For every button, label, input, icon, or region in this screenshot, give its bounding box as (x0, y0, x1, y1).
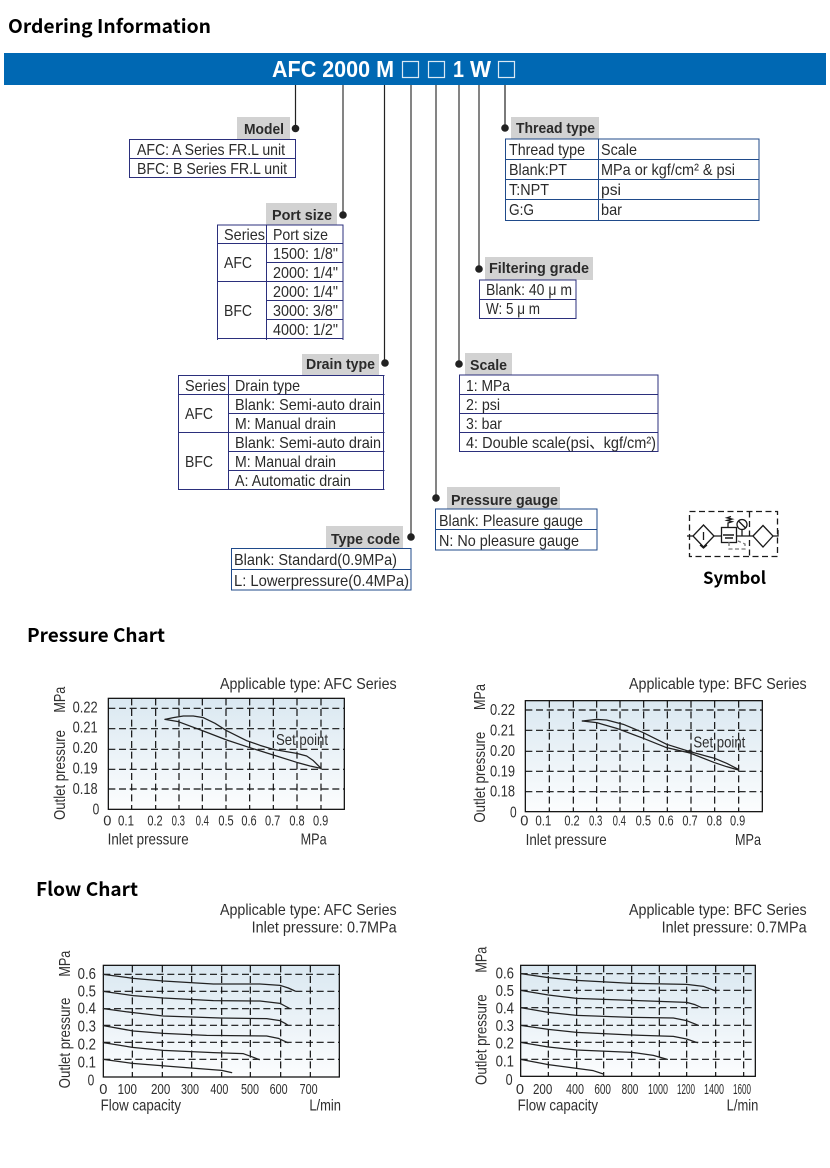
chart: flow AFC: Outlet pressure (57, 997, 74, 1088)
chart: pressure AFC: 0.2 (147, 813, 163, 829)
panel: thread type: T:NPT (509, 182, 549, 199)
chart: flow AFC: Flow capacity (101, 1098, 181, 1115)
panel: port size: 4000: 1/2" (273, 322, 338, 339)
chart: flow AFC: 0.1 (78, 1054, 96, 1071)
panel: drain type: Blank: Semi-auto drain (235, 397, 381, 414)
chart: pressure BFC: 0.4 (613, 813, 626, 829)
chart: flow AFC: Inlet pressure: 0.7MPa (252, 920, 397, 937)
chart: pressure BFC: Set point (693, 734, 746, 751)
panel: model (130, 117, 296, 178)
chart: flow BFC: MPa (474, 946, 491, 973)
chart: pressure AFC: 0.1 (118, 813, 134, 829)
chart: flow AFC: 600 (270, 1082, 288, 1098)
chart: pressure AFC: 0.3 (172, 813, 185, 829)
chart: flow AFC: 200 (151, 1082, 170, 1098)
chart: pressure BFC: 0.7 (682, 813, 698, 829)
chart: pressure AFC: Outlet pressure (52, 730, 69, 820)
chart: flow BFC: 200 (533, 1082, 552, 1098)
chart: flow BFC: 0.4 (496, 1000, 514, 1017)
chart: flow AFC: 0.6 (78, 966, 96, 983)
chart: pressure AFC: 0 (103, 813, 111, 829)
chart: flow AFC: 300 (181, 1082, 199, 1098)
chart: pressure BFC: 0.22 (490, 702, 515, 719)
chart: pressure AFC: 0.7 (265, 813, 280, 829)
panel: drain type: Drain type (235, 378, 300, 395)
chart: flow AFC: 0 (88, 1072, 95, 1089)
chart: pressure AFC: 0 (93, 801, 100, 818)
chart: pressure AFC: 0.8 (289, 813, 305, 829)
panel: thread type: Blank:PT (509, 162, 567, 179)
chart: pressure BFC: 0 (510, 804, 517, 821)
chart: pressure AFC: 0.21 (73, 719, 98, 736)
chart: pressure AFC: 0.6 (241, 813, 257, 829)
chart: flow BFC: 600 (594, 1082, 611, 1098)
chart: pressure BFC: 0.19 (490, 764, 515, 781)
panel: thread type: G:G (509, 202, 534, 219)
chart: flow AFC: 0.5 (78, 983, 96, 1000)
panel: drain type: M: Manual drain (235, 416, 336, 433)
icon: pneumatic symbol (687, 512, 778, 557)
chart: flow AFC: L/min (309, 1098, 341, 1115)
chart: flow BFC: L/min (727, 1098, 758, 1115)
panel: port size: BFC (224, 303, 252, 320)
chart: flow BFC: 0.2 (496, 1035, 514, 1052)
panel: pressure gauge: Pressure gauge (451, 492, 558, 509)
panel: filtering grade: Filtering grade (489, 260, 589, 277)
chart: flow BFC (474, 902, 807, 1115)
chart: pressure AFC: 0.22 (73, 700, 98, 717)
panel: filtering grade: Blank: 40 μ m (486, 282, 572, 299)
chart: pressure BFC: 0.3 (589, 813, 602, 829)
banner: model code: AFC 2000 M (272, 56, 394, 82)
chart: flow BFC: 0.6 (496, 965, 514, 982)
chart: pressure BFC: 0.18 (490, 784, 515, 801)
chart: flow BFC: 0 (506, 1072, 513, 1089)
chart: pressure BFC (472, 676, 807, 849)
chart: pressure AFC: 0.5 (218, 813, 234, 829)
panel: filtering grade: W: 5 μ m (486, 301, 540, 318)
chart: flow AFC: 0.2 (78, 1037, 96, 1054)
chart: flow AFC: 100 (118, 1082, 137, 1098)
panel: port size (217, 203, 344, 340)
panel: port size: Port size (272, 207, 332, 224)
panel: drain type (178, 354, 384, 490)
chart: pressure BFC: 0.21 (490, 722, 515, 739)
chart: pressure AFC: 0.4 (196, 813, 209, 829)
chart: flow AFC: Applicable type: AFC Series (220, 902, 397, 919)
panel: scale: 3: bar (466, 416, 503, 433)
panel: drain type: A: Automatic drain (235, 473, 351, 490)
banner: model code: W (470, 56, 491, 82)
panel: scale (460, 353, 658, 452)
chart: pressure BFC: 0.9 (730, 813, 745, 829)
chart: pressure BFC: Inlet pressure (526, 832, 607, 849)
chart: flow AFC: 700 (300, 1082, 318, 1098)
panel: pressure gauge: Blank: Pleasure gauge (439, 513, 583, 530)
chart: pressure AFC: 0.9 (313, 813, 328, 829)
chart: pressure BFC: 0.20 (490, 743, 515, 760)
chart: flow AFC: 0.3 (78, 1019, 96, 1036)
chart: flow BFC: Outlet pressure (474, 994, 491, 1085)
panel: thread type: bar (601, 202, 623, 219)
chart: flow BFC: Flow capacity (518, 1098, 598, 1115)
panel: filtering grade (480, 257, 593, 318)
panel: port size: 2000: 1/4" (273, 265, 338, 282)
panel: port size: Port size (273, 227, 328, 244)
chart: pressure AFC: Inlet pressure (108, 831, 189, 848)
panel: model: Model (244, 121, 284, 138)
chart: pressure BFC: 0.6 (658, 813, 674, 829)
panel: scale: Scale (470, 357, 507, 374)
panel: port size: 1500: 1/8" (273, 246, 338, 263)
panel: type code: L: Lowerpressure(0.4MPa) (234, 573, 409, 590)
panel: drain type: Drain type (306, 356, 375, 373)
chart: flow BFC: 1200 (677, 1082, 695, 1098)
chart: pressure AFC: Applicable type: AFC Series (220, 676, 397, 693)
panel: scale: 4: Double scale(psi、kgf/cm²) (466, 435, 656, 452)
chart: flow AFC: 0 (99, 1082, 107, 1098)
chart: pressure AFC: 0.19 (73, 760, 98, 777)
chart: pressure AFC: Set point (276, 732, 329, 749)
panel: thread type: Thread type (509, 142, 585, 159)
chart: pressure AFC: MPa (301, 831, 327, 848)
chart: pressure BFC: MPa (472, 684, 489, 710)
chart: pressure BFC: Outlet pressure (472, 731, 489, 823)
chart: flow BFC: 400 (566, 1082, 584, 1098)
panel: pressure gauge: N: No pleasure gauge (439, 533, 579, 550)
panel: drain type: M: Manual drain (235, 454, 336, 471)
chart: pressure BFC: 0.2 (564, 813, 580, 829)
chart: flow BFC: Applicable type: BFC Series (629, 902, 807, 919)
chart: flow AFC (57, 902, 397, 1115)
chart: pressure AFC: 0.18 (73, 781, 98, 798)
chart: flow BFC: Inlet pressure: 0.7MPa (662, 920, 807, 937)
banner: model code (4, 53, 826, 85)
panel: pressure gauge (436, 487, 597, 550)
panel: thread type (506, 117, 759, 220)
chart: pressure AFC (52, 676, 397, 848)
chart: flow AFC: 400 (210, 1082, 228, 1098)
panel: port size: 3000: 3/8" (273, 303, 338, 320)
heading: Flow Chart: Flow Chart (36, 875, 138, 902)
chart: flow BFC: 1600 (733, 1082, 751, 1098)
chart: pressure BFC: MPa (735, 832, 761, 849)
panel: thread type: psi (601, 182, 621, 199)
panel: thread type: MPa or kgf/cm² & psi (601, 162, 735, 179)
chart: pressure AFC: MPa (52, 686, 69, 713)
panel: thread type: Scale (601, 142, 637, 159)
chart: flow AFC: 500 (241, 1082, 259, 1098)
panel: port size: Series (224, 227, 265, 244)
panel: drain type: BFC (185, 454, 213, 471)
chart: pressure BFC: 0.5 (636, 813, 651, 829)
chart: pressure AFC: 0.20 (73, 740, 98, 757)
title: Ordering Information: Ordering Information (8, 12, 211, 39)
chart: flow BFC: 0.5 (496, 983, 514, 1000)
panel: port size: AFC (224, 255, 252, 272)
panel: model: AFC: A Series FR.L unit (137, 142, 285, 159)
chart: flow AFC: 0.4 (78, 1001, 96, 1018)
chart: flow BFC: 0.1 (496, 1054, 514, 1071)
panel: type code: Type code (331, 531, 400, 548)
panel: type code (232, 526, 411, 590)
panel: drain type: AFC (185, 406, 213, 423)
chart: flow BFC: 0.3 (496, 1018, 514, 1035)
panel: port size: 2000: 1/4" (273, 284, 338, 301)
heading: Pressure Chart: Pressure Chart (27, 621, 165, 648)
panel: type code: Blank: Standard(0.9MPa) (234, 552, 397, 569)
chart: pressure BFC: Applicable type: BFC Series (629, 676, 807, 693)
chart: flow BFC: 0 (516, 1082, 524, 1098)
chart: flow BFC: 1400 (704, 1082, 724, 1098)
chart: flow AFC: MPa (57, 950, 74, 977)
panel: model: BFC: B Series FR.L unit (137, 161, 287, 178)
panel: scale: 2: psi (466, 397, 500, 414)
chart: pressure BFC: 0 (520, 813, 528, 829)
panel: thread type: Thread type (516, 120, 595, 137)
banner: model code: 1 (453, 56, 464, 82)
chart: flow BFC: 800 (622, 1082, 638, 1098)
panel: drain type: Series (185, 378, 226, 395)
chart: pressure BFC: 0.1 (535, 813, 551, 829)
panel: scale: 1: MPa (466, 378, 510, 395)
connector lines from model code to option tables (292, 85, 509, 541)
label: Symbol: Symbol (703, 564, 766, 589)
panel: drain type: Blank: Semi-auto drain (235, 435, 381, 452)
chart: pressure BFC: 0.8 (707, 813, 722, 829)
chart: flow BFC: 1000 (648, 1082, 668, 1098)
